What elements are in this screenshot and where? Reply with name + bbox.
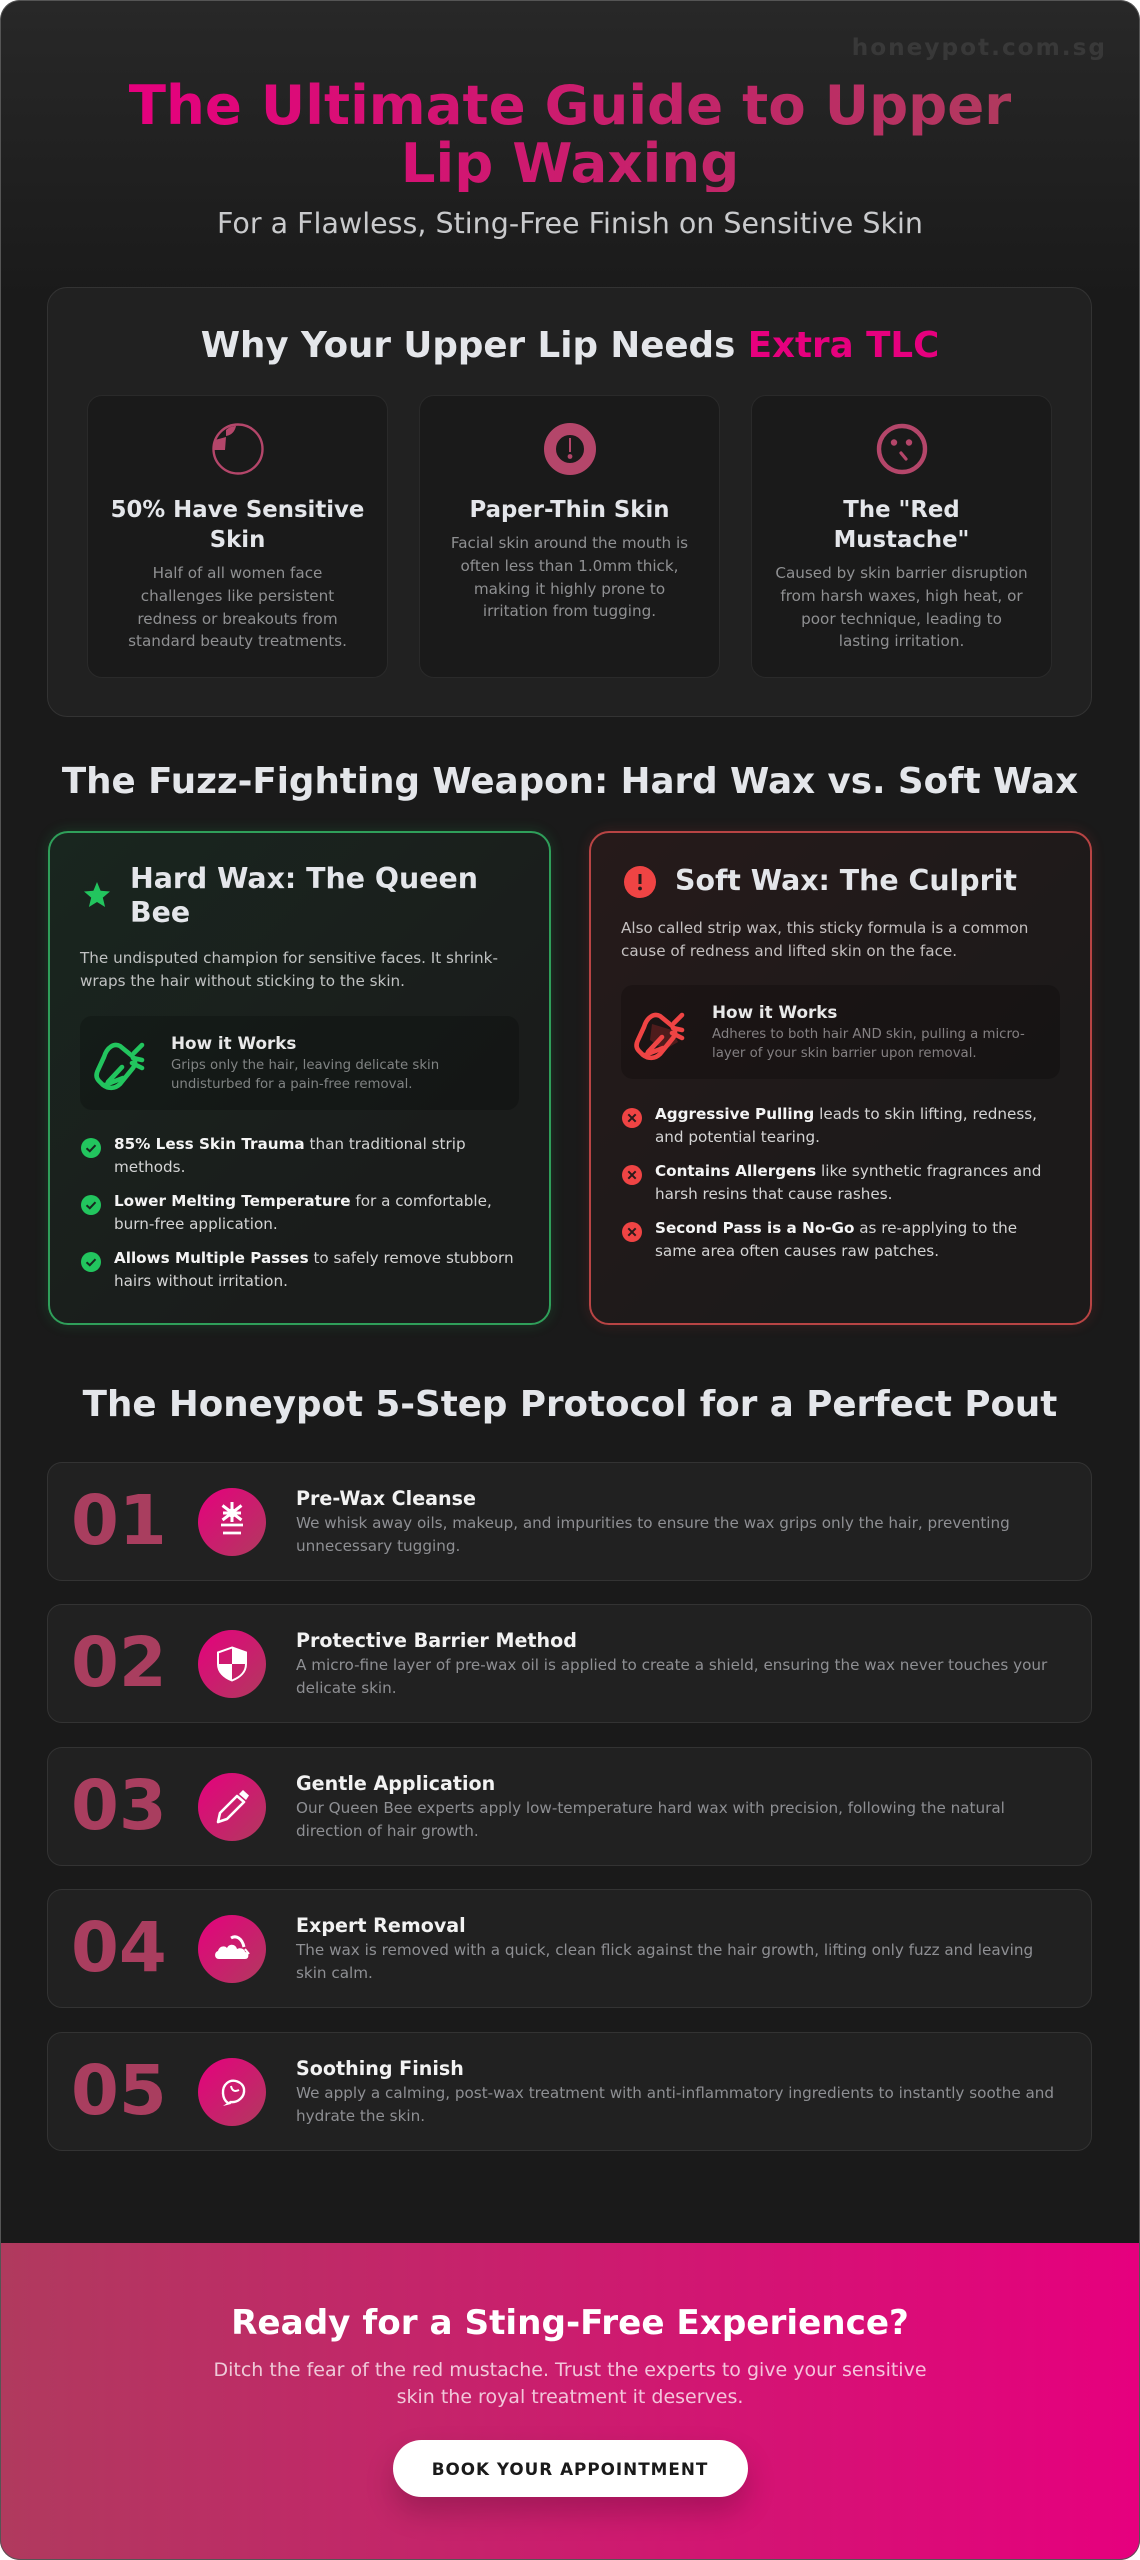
how it works title: How it Works xyxy=(171,1033,296,1053)
step 2 xyxy=(47,1604,1092,1723)
intro text: The undisputed champion for sensitive faces. It shrink- xyxy=(80,949,498,967)
step 5 xyxy=(47,2032,1092,2151)
card text: from harsh waxes, high heat, or xyxy=(780,587,1023,605)
drawback text xyxy=(655,1162,1041,1203)
benefit text: 85% Less Skin Trauma than traditional strip xyxy=(114,1135,466,1153)
card heading: The "Red xyxy=(843,497,960,523)
step text xyxy=(296,1656,1048,1697)
how it works box xyxy=(80,1016,519,1110)
step title: Protective Barrier Method xyxy=(296,1629,577,1652)
watermark: honeypot.com.sg xyxy=(852,34,1107,61)
step text: unnecessary tugging. xyxy=(296,1537,460,1555)
how it works text xyxy=(712,1027,1025,1061)
step text: skin calm. xyxy=(296,1964,373,1982)
card text: challenges like persistent xyxy=(141,587,334,605)
benefit text: Lower Melting Temperature for a comfortable, xyxy=(114,1192,492,1210)
icon: check xyxy=(81,1195,101,1215)
benefit text xyxy=(114,1192,492,1233)
title xyxy=(127,76,1013,192)
how it works text: Grips only the hair, leaving delicate skin xyxy=(171,1058,439,1073)
benefit text: hairs without irritation. xyxy=(114,1272,288,1290)
footer text: Ditch the fear of the red mustache. Trust the experts to give your sensitive xyxy=(213,2359,927,2381)
drawback text xyxy=(655,1105,1037,1146)
button: book your appointment: BOOK YOUR APPOINTMENT xyxy=(432,2459,708,2479)
step text: direction of hair growth. xyxy=(296,1822,479,1840)
icon: cleanse sparkle xyxy=(198,1488,266,1556)
subtitle: For a Flawless, Sting-Free Finish on Sensitive Skin xyxy=(217,207,923,240)
step 4 xyxy=(47,1889,1092,2008)
drawback text: Second Pass is a No-Go as re-applying to the xyxy=(655,1219,1017,1237)
card text: redness or breakouts from xyxy=(137,610,338,628)
footer call to action xyxy=(0,2243,1140,2560)
card text: standard beauty treatments. xyxy=(128,632,347,650)
card: 50% have sensitive skin xyxy=(87,395,388,678)
step text: Our Queen Bee experts apply low-temperature hard wax with precision, following the natural xyxy=(296,1799,1005,1817)
step text: We apply a calming, post-wax treatment with anti-inflammatory ingredients to instantly soothe and xyxy=(296,2084,1054,2102)
card: the red mustache xyxy=(751,395,1052,678)
step text xyxy=(296,1941,1033,1982)
how it works text xyxy=(171,1058,439,1092)
icon: irritated face xyxy=(876,424,928,474)
card heading xyxy=(834,497,969,553)
step text: We whisk away oils, makeup, and impurities to ensure the wax grips only the hair, preventing xyxy=(296,1514,1010,1532)
benefit text xyxy=(114,1249,514,1290)
card heading xyxy=(111,497,364,553)
card: paper-thin skin xyxy=(419,395,720,678)
benefit text: Allows Multiple Passes to safely remove stubborn xyxy=(114,1249,514,1267)
icon: green carrot xyxy=(94,1042,144,1090)
heading: hard wax vs soft wax: The Fuzz-Fighting Weapon: Hard Wax vs. Soft Wax xyxy=(62,761,1078,802)
benefit text xyxy=(114,1135,466,1176)
drawback text: harsh resins that cause rashes. xyxy=(655,1185,893,1203)
heading: why your upper lip: Why Your Upper Lip Needs Extra TLC xyxy=(201,325,939,366)
card heading: Mustache" xyxy=(834,527,969,553)
footer text: skin the royal treatment it deserves. xyxy=(397,2386,743,2408)
intro text: cause of redness and lifted skin on the face. xyxy=(621,942,957,960)
footer heading: Ready for a Sting-Free Experience? xyxy=(231,2303,909,2343)
card heading: 50% Have Sensitive xyxy=(111,497,364,523)
benefit 3 xyxy=(81,1249,514,1290)
title: Lip Waxing xyxy=(401,131,739,195)
step title: Soothing Finish xyxy=(296,2057,464,2080)
card text: often less than 1.0mm thick, xyxy=(460,557,679,575)
step 3 xyxy=(47,1747,1092,1866)
step title: Pre-Wax Cleanse xyxy=(296,1487,476,1510)
heading: 5-step protocol: The Honeypot 5-Step Protocol for a Perfect Pout xyxy=(83,1384,1057,1425)
drawback 2 xyxy=(622,1162,1041,1203)
footer text xyxy=(0,2357,1140,2411)
how it works text: layer of your skin barrier upon removal. xyxy=(712,1046,977,1061)
card text: making it highly prone to xyxy=(474,580,665,598)
icon: pencil xyxy=(198,1773,266,1841)
step text xyxy=(296,2082,1054,2128)
panel: hard wax xyxy=(48,831,551,1325)
step number: 02 xyxy=(71,1623,167,1703)
card text: Facial skin around the mouth is xyxy=(451,534,688,552)
how it works box xyxy=(621,985,1060,1079)
intro text xyxy=(80,949,498,990)
icon: cross xyxy=(622,1222,642,1242)
card heading: Skin xyxy=(210,527,265,553)
panel: soft wax xyxy=(589,831,1092,1325)
icon: shield xyxy=(198,1630,266,1698)
icon: sensitive skin circle xyxy=(212,423,264,475)
button: book your appointment xyxy=(392,2440,748,2497)
card text: Half of all women face xyxy=(153,564,322,582)
step text: A micro-fine layer of pre-wax oil is applied to create a shield, ensuring the wax never touches your xyxy=(296,1656,1047,1674)
icon: cross xyxy=(622,1108,642,1128)
icon: alert ring xyxy=(544,423,596,475)
icon: check xyxy=(81,1138,101,1158)
step title: Expert Removal xyxy=(296,1914,466,1937)
step 1 xyxy=(47,1462,1092,1581)
drawback text: Aggressive Pulling leads to skin lifting, redness, xyxy=(655,1105,1037,1123)
drawback 1 xyxy=(622,1105,1037,1146)
how it works text: undisturbed for a pain-free removal. xyxy=(171,1077,413,1092)
step text xyxy=(296,1514,1010,1555)
drawback text: same area often causes raw patches. xyxy=(655,1242,939,1260)
card text: Caused by skin barrier disruption xyxy=(775,564,1028,582)
drawback text: and potential tearing. xyxy=(655,1128,820,1146)
step number: 01 xyxy=(71,1481,167,1561)
icon: soothing swirl xyxy=(198,2058,266,2126)
benefit text: methods. xyxy=(114,1158,185,1176)
benefit 2 xyxy=(81,1192,492,1233)
benefit text: burn-free application. xyxy=(114,1215,278,1233)
how it works title: How it Works xyxy=(712,1002,837,1022)
card text xyxy=(451,534,688,620)
step text: The wax is removed with a quick, clean flick against the hair growth, lifting only fuzz and leaving xyxy=(296,1941,1033,1959)
card text xyxy=(775,564,1028,650)
icon: check xyxy=(81,1252,101,1272)
step number: 04 xyxy=(71,1908,167,1988)
panel heading: Soft Wax: The Culprit xyxy=(675,864,1017,897)
intro text xyxy=(621,919,1028,960)
intro text: Also called strip wax, this sticky formula is a common xyxy=(621,919,1028,937)
panel heading: Hard Wax: The Queen xyxy=(130,862,478,895)
icon: red carrot xyxy=(634,1012,684,1060)
icon: alert xyxy=(624,866,656,898)
panel heading: Bee xyxy=(130,896,190,929)
drawback 3 xyxy=(622,1219,1017,1260)
panel heading xyxy=(130,862,478,929)
card text: irritation from tugging. xyxy=(483,602,656,620)
icon: cloud swoosh xyxy=(198,1915,266,1983)
card text xyxy=(128,564,347,650)
drawback text xyxy=(655,1219,1017,1260)
step title: Gentle Application xyxy=(296,1772,495,1795)
card text: lasting irritation. xyxy=(839,632,964,650)
intro text: wraps the hair without sticking to the skin. xyxy=(80,972,405,990)
step number: 03 xyxy=(71,1766,167,1846)
step text: delicate skin. xyxy=(296,1679,397,1697)
icon: star xyxy=(84,882,110,907)
step number: 05 xyxy=(71,2051,167,2131)
card text: poor technique, leading to xyxy=(801,610,1002,628)
step text xyxy=(296,1799,1005,1840)
card heading: Paper-Thin Skin xyxy=(470,497,670,523)
how it works text: Adheres to both hair AND skin, pulling a micro- xyxy=(712,1027,1025,1042)
step text: hydrate the skin. xyxy=(296,2107,425,2125)
drawback text: Contains Allergens like synthetic fragrances and xyxy=(655,1162,1041,1180)
icon: cross xyxy=(622,1165,642,1185)
title: The Ultimate Guide to Upper xyxy=(129,73,1011,137)
panel: why your upper lip needs extra TLC xyxy=(47,287,1092,717)
benefit 1 xyxy=(81,1135,466,1176)
